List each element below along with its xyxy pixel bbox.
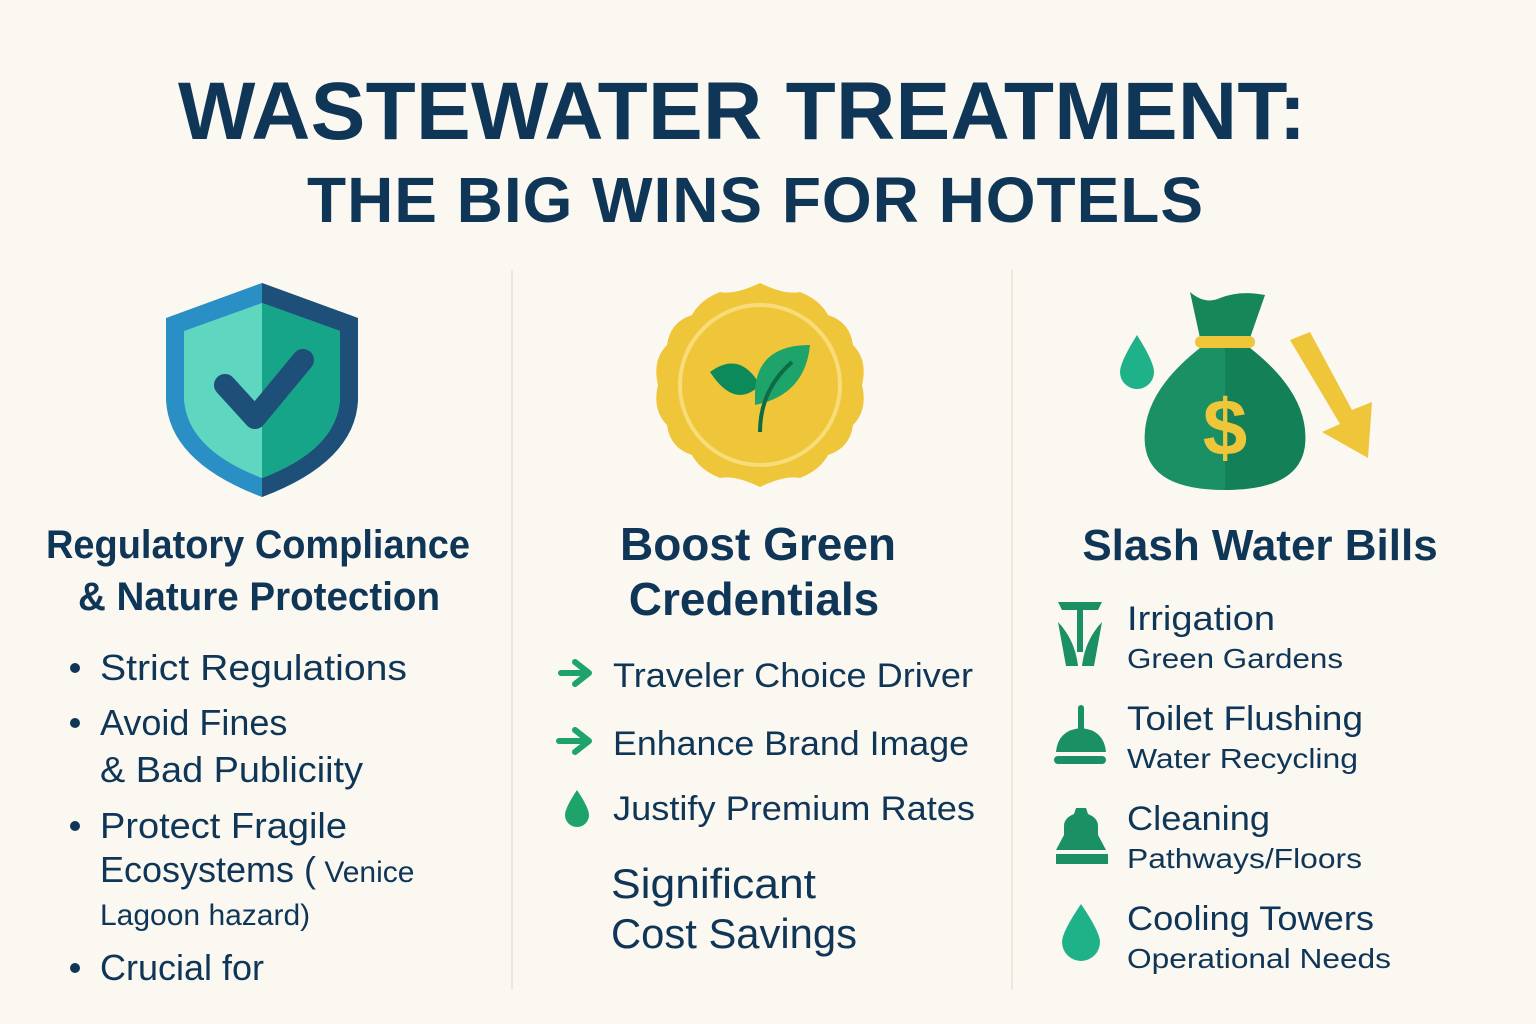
title: THE BIG WINS FOR HOTELS — [307, 164, 1203, 236]
title — [178, 66, 1306, 236]
heading: Regulatory Compliance — [46, 523, 470, 567]
list: Justify Premium Rates — [613, 790, 975, 828]
bullet list: Protect Fragile — [100, 805, 347, 846]
bullet list: Avoid Fines — [100, 702, 287, 743]
icon: money bag: $ — [1203, 383, 1247, 472]
callout: cost savings: Significant — [611, 860, 816, 907]
heading: Slash Water Bills — [1082, 521, 1438, 570]
panel: green credentials — [559, 283, 975, 957]
list: Irrigation — [1127, 600, 1275, 638]
list: Cooling Towers — [1127, 900, 1374, 938]
bullet list: & Bad Publiciity — [100, 749, 363, 790]
callout: cost savings — [611, 860, 857, 957]
list: Cleaning — [1127, 800, 1270, 838]
list: Pathways/Floors — [1127, 843, 1362, 874]
bullet list: Crucial for — [100, 947, 264, 988]
list: Green Gardens — [1127, 643, 1343, 674]
icon: badge leaf — [656, 283, 864, 487]
panel: regulatory compliance — [46, 283, 470, 988]
list: Toilet Flushing — [1127, 700, 1363, 738]
bullet list — [70, 647, 414, 988]
icon: shield — [166, 283, 358, 497]
list: Water Recycling — [1127, 743, 1358, 774]
panel: water bills — [1054, 292, 1438, 974]
list — [1054, 600, 1391, 974]
callout: cost savings: Cost Savings — [611, 910, 857, 957]
list — [559, 657, 975, 828]
title: WASTEWATER TREATMENT: — [178, 66, 1306, 157]
list: Operational Needs — [1127, 943, 1391, 974]
bullet list: Ecosystems ( Venice — [100, 849, 414, 890]
heading — [620, 518, 896, 625]
heading — [46, 523, 470, 619]
bullet list: Strict Regulations — [100, 647, 407, 688]
icon: money bag — [1120, 292, 1372, 490]
heading: & Nature Protection — [78, 575, 440, 619]
list: Enhance Brand Image — [613, 725, 969, 763]
heading: Credentials — [629, 573, 879, 625]
bullet list: Lagoon hazard) — [100, 899, 310, 932]
list: Traveler Choice Driver — [613, 657, 973, 695]
heading: Boost Green — [620, 518, 896, 570]
